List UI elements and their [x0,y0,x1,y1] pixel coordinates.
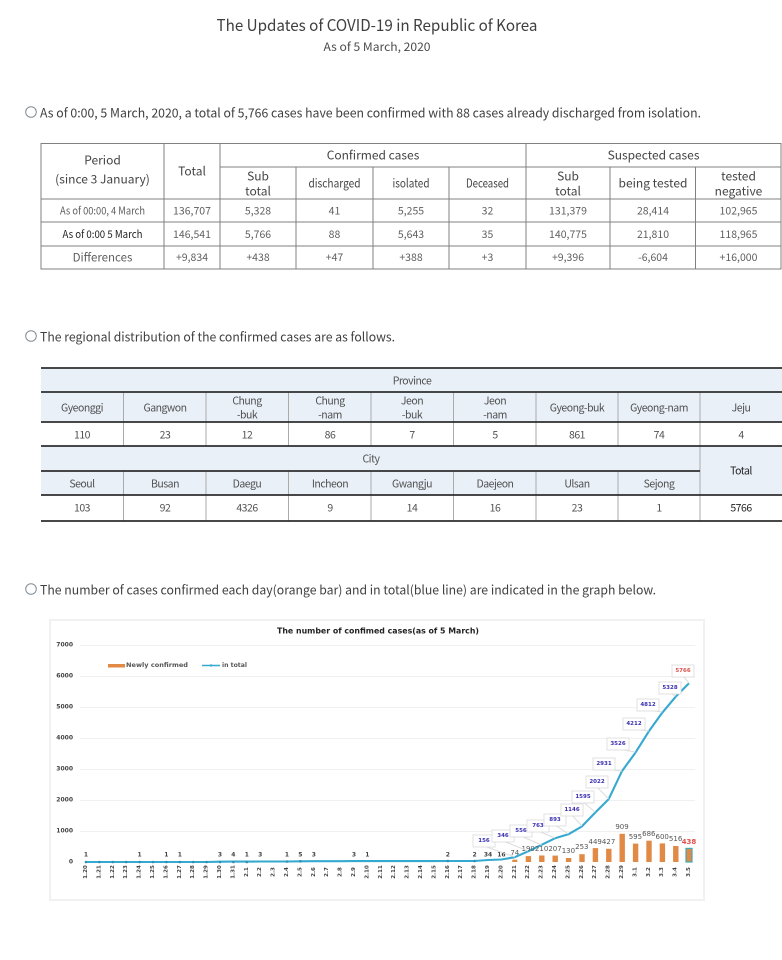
callouts: cumulative totals: 5328 [662,685,678,691]
chart panel: confirmed cases [50,620,704,900]
city values: 4326 [236,500,258,516]
row: 4 March: 5,328 [245,204,271,218]
city names: Daejeon [477,476,514,492]
small data labels: 2 [473,852,477,858]
city names: Seoul [69,476,95,492]
table: national cases: Sub [557,168,579,184]
small data labels: 3 [312,852,316,858]
row: 5 March: 21,810 [637,227,669,242]
x axis date labels: 1.31 [230,865,236,879]
x axis date labels: 2.16 [445,865,451,879]
x axis date labels: 2.22 [525,865,531,879]
province names: Chung [232,394,262,408]
bar value labels: 438 [682,838,696,846]
table: national cases: Suspected cases [608,146,700,164]
callouts: cumulative totals: 1146 [564,807,580,813]
small data labels: 3 [352,852,356,858]
x axis date labels: 2.23 [539,865,545,879]
province values: 5 [492,428,498,442]
callouts: cumulative totals: 5766 [675,668,691,674]
bar value labels: 74 [510,849,520,857]
small data labels: 34 [484,852,492,858]
x axis date labels: 2.3 [271,867,277,877]
bar value labels: 909 [615,823,629,831]
small data labels: 1 [164,852,168,858]
x axis date labels: 3.5 [686,867,692,877]
city values: 103 [74,500,91,516]
row: differences [73,250,758,266]
y axis labels: 0 [69,858,73,866]
x axis date labels: 1.21 [96,865,102,879]
row: differences: Differences [73,250,132,266]
province names: -nam [318,408,342,422]
x axis date labels: 2.26 [579,865,585,879]
table: regional distribution [41,368,782,521]
text block: summary: As of 0:00, 5 March, 2020, a total of 5,766 cases have been confirmed with 88 cases already discharged from isolation. [40,102,701,122]
x axis date labels: 3.2 [646,867,652,877]
callouts: cumulative totals: 556 [515,828,527,834]
bar value labels: 253 [575,843,588,851]
city names: Ulsan [564,476,590,492]
row: differences: -6,604 [638,250,668,265]
x axis date labels: 2.2 [257,867,263,877]
x axis date labels: 2.7 [324,867,330,877]
callouts: cumulative totals: 2022 [589,779,605,785]
row: 4 March: 5,255 [398,204,424,218]
bar value labels [510,823,696,857]
city values: 1 [656,500,662,516]
x axis date labels: 2.21 [512,865,518,879]
x axis date labels: 1.28 [190,865,196,879]
small data labels: 1 [245,852,249,858]
x axis date labels: 1.29 [204,865,210,879]
x axis date labels: 2.10 [364,865,370,879]
x axis date labels: 1.26 [163,865,169,879]
y axis labels: 6000 [56,672,73,680]
table: national cases: total [555,182,581,200]
row: differences: +9,834 [176,250,208,265]
city values: 5766 [730,500,752,516]
row: 4 March: As of 00:00, 4 March [60,204,145,218]
province values: 86 [325,428,336,442]
city values: 92 [160,500,171,516]
city names [69,476,675,492]
x axis date labels: 2.11 [378,865,384,879]
bar value labels: 130 [562,847,575,855]
x axis date labels: 2.25 [565,865,571,879]
x axis date labels: 2.27 [592,865,598,879]
x axis date labels: 3.1 [632,867,638,877]
province values: 110 [74,428,91,442]
x axis date labels: 2.15 [431,865,437,879]
row: 4 March: 32 [482,204,493,218]
title: As of 5 March, 2020 [324,39,430,55]
callouts: cumulative totals: 1595 [575,794,591,800]
small data labels: 1 [285,852,289,858]
x axis date labels: 2.18 [472,865,478,879]
title: The Updates of COVID-19 in Republic of Korea [216,12,538,36]
legend: in total [222,662,247,669]
bar value labels: 210 [535,845,548,853]
callouts: cumulative totals: 346 [497,833,509,839]
small data labels: 1 [84,852,88,858]
province names: Gangwon [143,400,187,416]
bar value labels: 686 [642,830,656,838]
province names: Jeon [484,394,506,408]
small data labels: 3 [218,852,222,858]
province names: Gyeong-buk [550,400,605,416]
province values: 12 [242,428,253,442]
table: national cases: tested [721,168,756,184]
callouts: cumulative totals [473,665,694,857]
province values: 7 [409,428,415,442]
chart title: The number of confimed cases(as of 5 March) [277,626,479,636]
x axis date labels: 3.4 [673,867,679,877]
province names: -buk [237,408,258,422]
row: 4 March: 41 [329,204,340,218]
legend [108,662,247,669]
x axis date labels: 2.5 [297,867,303,877]
small data labels: 1 [178,852,182,858]
x axis date labels: 1.23 [123,865,129,879]
y axis labels: 7000 [56,642,73,648]
small data labels: 1 [138,852,142,858]
row: differences: +438 [246,250,270,265]
callouts: cumulative totals: 893 [549,817,561,823]
callouts: cumulative totals: 763 [532,823,544,829]
x axis date labels: 2.12 [391,865,397,879]
province values [74,428,744,442]
table: national cases: Deceased [466,174,509,192]
bar value labels: 190 [522,845,535,853]
table: national cases: negative [715,182,763,200]
row: 5 March: 5,766 [245,227,271,242]
small data labels: 3 [258,852,262,858]
row: 5 March: 5,643 [398,227,424,242]
x axis date labels: 2.9 [351,867,357,877]
row: 4 March: 102,965 [720,204,758,218]
province values: 861 [569,428,586,442]
table: national cases: discharged [308,174,360,192]
city names: Daegu [233,476,261,492]
x axis date labels: 1.24 [137,865,143,879]
table: national cases: being tested [619,174,687,192]
city values: 14 [407,500,418,516]
province names: Chung [315,394,345,408]
x axis date labels: 3.3 [659,867,665,877]
small data labels [84,852,506,858]
title [216,12,538,55]
city names: Incheon [312,476,348,492]
table: national cases: Period [84,152,121,168]
x axis date labels: 2.14 [418,865,424,879]
table: national cases [41,143,781,270]
x axis date labels: 2.20 [498,865,504,879]
x axis date labels: 1.27 [177,865,183,879]
text block: chart intro: The number of cases confirmed each day(orange bar) and in total(blue line) are indicated in the graph below. [40,580,656,598]
x axis date labels: 2.4 [284,867,290,877]
callouts: cumulative totals: 2931 [596,761,612,767]
row: 5 March: 140,775 [549,227,587,242]
table: national cases: Confirmed cases [327,146,420,164]
table: regional distribution: Total [730,464,752,478]
bar value labels: 516 [669,835,683,843]
row: differences: +9,396 [552,250,584,265]
small data labels: 16 [497,852,506,858]
row: differences: +3 [482,250,493,265]
blue line: in total [85,683,689,863]
province names: Gyeonggi [61,400,104,416]
orange bars: newly confirmed [512,834,692,862]
table: national cases: isolated [392,174,430,192]
city values [74,500,752,516]
bar value labels: 449 [589,838,602,846]
row: 4 March: 28,414 [637,204,669,218]
row: 5 March: 146,541 [173,227,211,242]
province names: -nam [483,408,507,422]
city values: 9 [327,500,333,516]
province names: Gyeong-nam [630,400,688,416]
x axis date labels: 2.8 [338,867,344,877]
table: national cases: Total [178,162,206,180]
x axis date labels: 1.22 [110,865,116,879]
x axis date labels: 2.17 [458,865,464,879]
table: national cases: (since 3 January) [55,170,150,188]
callouts: cumulative totals: 3526 [610,741,626,747]
legend: Newly confirmed [126,662,188,669]
row: differences: +47 [326,250,343,265]
x axis date labels: 2.13 [405,865,411,879]
x axis date labels: 2.19 [485,865,491,879]
small data labels: 4 [231,852,235,858]
province names [61,394,750,422]
row: differences: +388 [399,250,423,265]
callouts: cumulative totals: 156 [478,838,490,844]
row: 5 March: 88 [329,227,340,242]
x axis date labels: 1.25 [150,865,156,879]
province values: 4 [738,428,744,442]
bar value labels: 427 [602,838,615,846]
y axis labels: 3000 [56,766,73,772]
small data labels: 2 [446,852,450,858]
table: national cases: total [245,182,271,200]
row: 5 March [62,227,758,242]
x axis date labels: 2.6 [311,867,317,877]
x axis date labels: 1.30 [217,865,223,879]
y axis labels: 1000 [56,828,73,834]
bar value labels: 600 [656,833,669,841]
small data labels: 1 [365,852,369,858]
province names: Jeju [732,400,750,416]
text block: regional intro: The regional distribution of the confirmed cases are as follows. [40,326,395,346]
row: 5 March: 35 [482,227,493,242]
row: 4 March [60,204,758,218]
city names: Busan [151,476,179,492]
x axis date labels [83,865,692,879]
y axis labels: 5000 [56,704,73,710]
row: 5 March: 118,965 [720,227,758,242]
table: regional distribution: Province [393,374,432,388]
city values: 23 [572,500,583,516]
city names: Sejong [644,476,675,492]
province values: 74 [654,428,665,442]
city names: Gwangju [392,476,432,492]
province names: -buk [402,408,423,422]
y axis labels: 4000 [56,734,73,742]
bar value labels: 207 [548,845,562,853]
callouts: cumulative totals: 4812 [640,702,656,708]
x axis date labels: 1.20 [83,865,89,879]
callouts: cumulative totals: 4212 [626,721,642,727]
y axis labels [56,642,73,866]
table: regional distribution: City [362,452,381,466]
x axis date labels: 2.1 [244,867,250,877]
bar value labels: 595 [629,833,642,841]
row: 4 March: 136,707 [173,204,211,218]
city values: 16 [490,500,501,516]
province names: Jeon [401,394,423,408]
x axis date labels: 2.24 [552,865,558,879]
table: national cases: Sub [247,168,269,184]
x axis date labels: 2.29 [619,865,625,879]
row: differences: +16,000 [720,250,758,265]
y axis labels: 2000 [56,796,73,804]
x axis date labels: 2.28 [606,865,612,879]
province values: 23 [160,428,171,442]
small data labels: 5 [298,852,302,858]
row: 5 March: As of 0:00 5 March [62,227,142,242]
row: 4 March: 131,379 [549,204,587,218]
